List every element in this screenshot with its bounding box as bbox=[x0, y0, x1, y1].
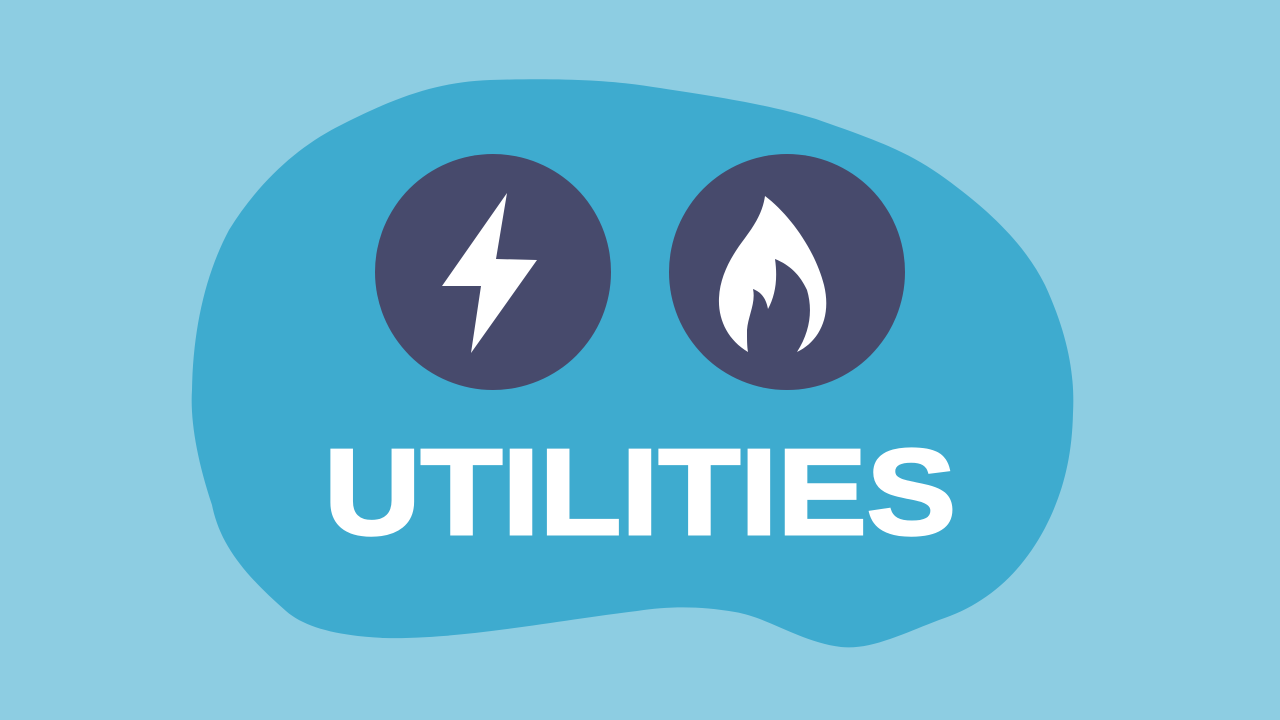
icon: gas flame circle bbox=[669, 154, 905, 390]
title: UTILITIES bbox=[324, 424, 956, 560]
icon: electricity circle bbox=[375, 154, 611, 390]
panel: blob background bbox=[192, 79, 1073, 647]
